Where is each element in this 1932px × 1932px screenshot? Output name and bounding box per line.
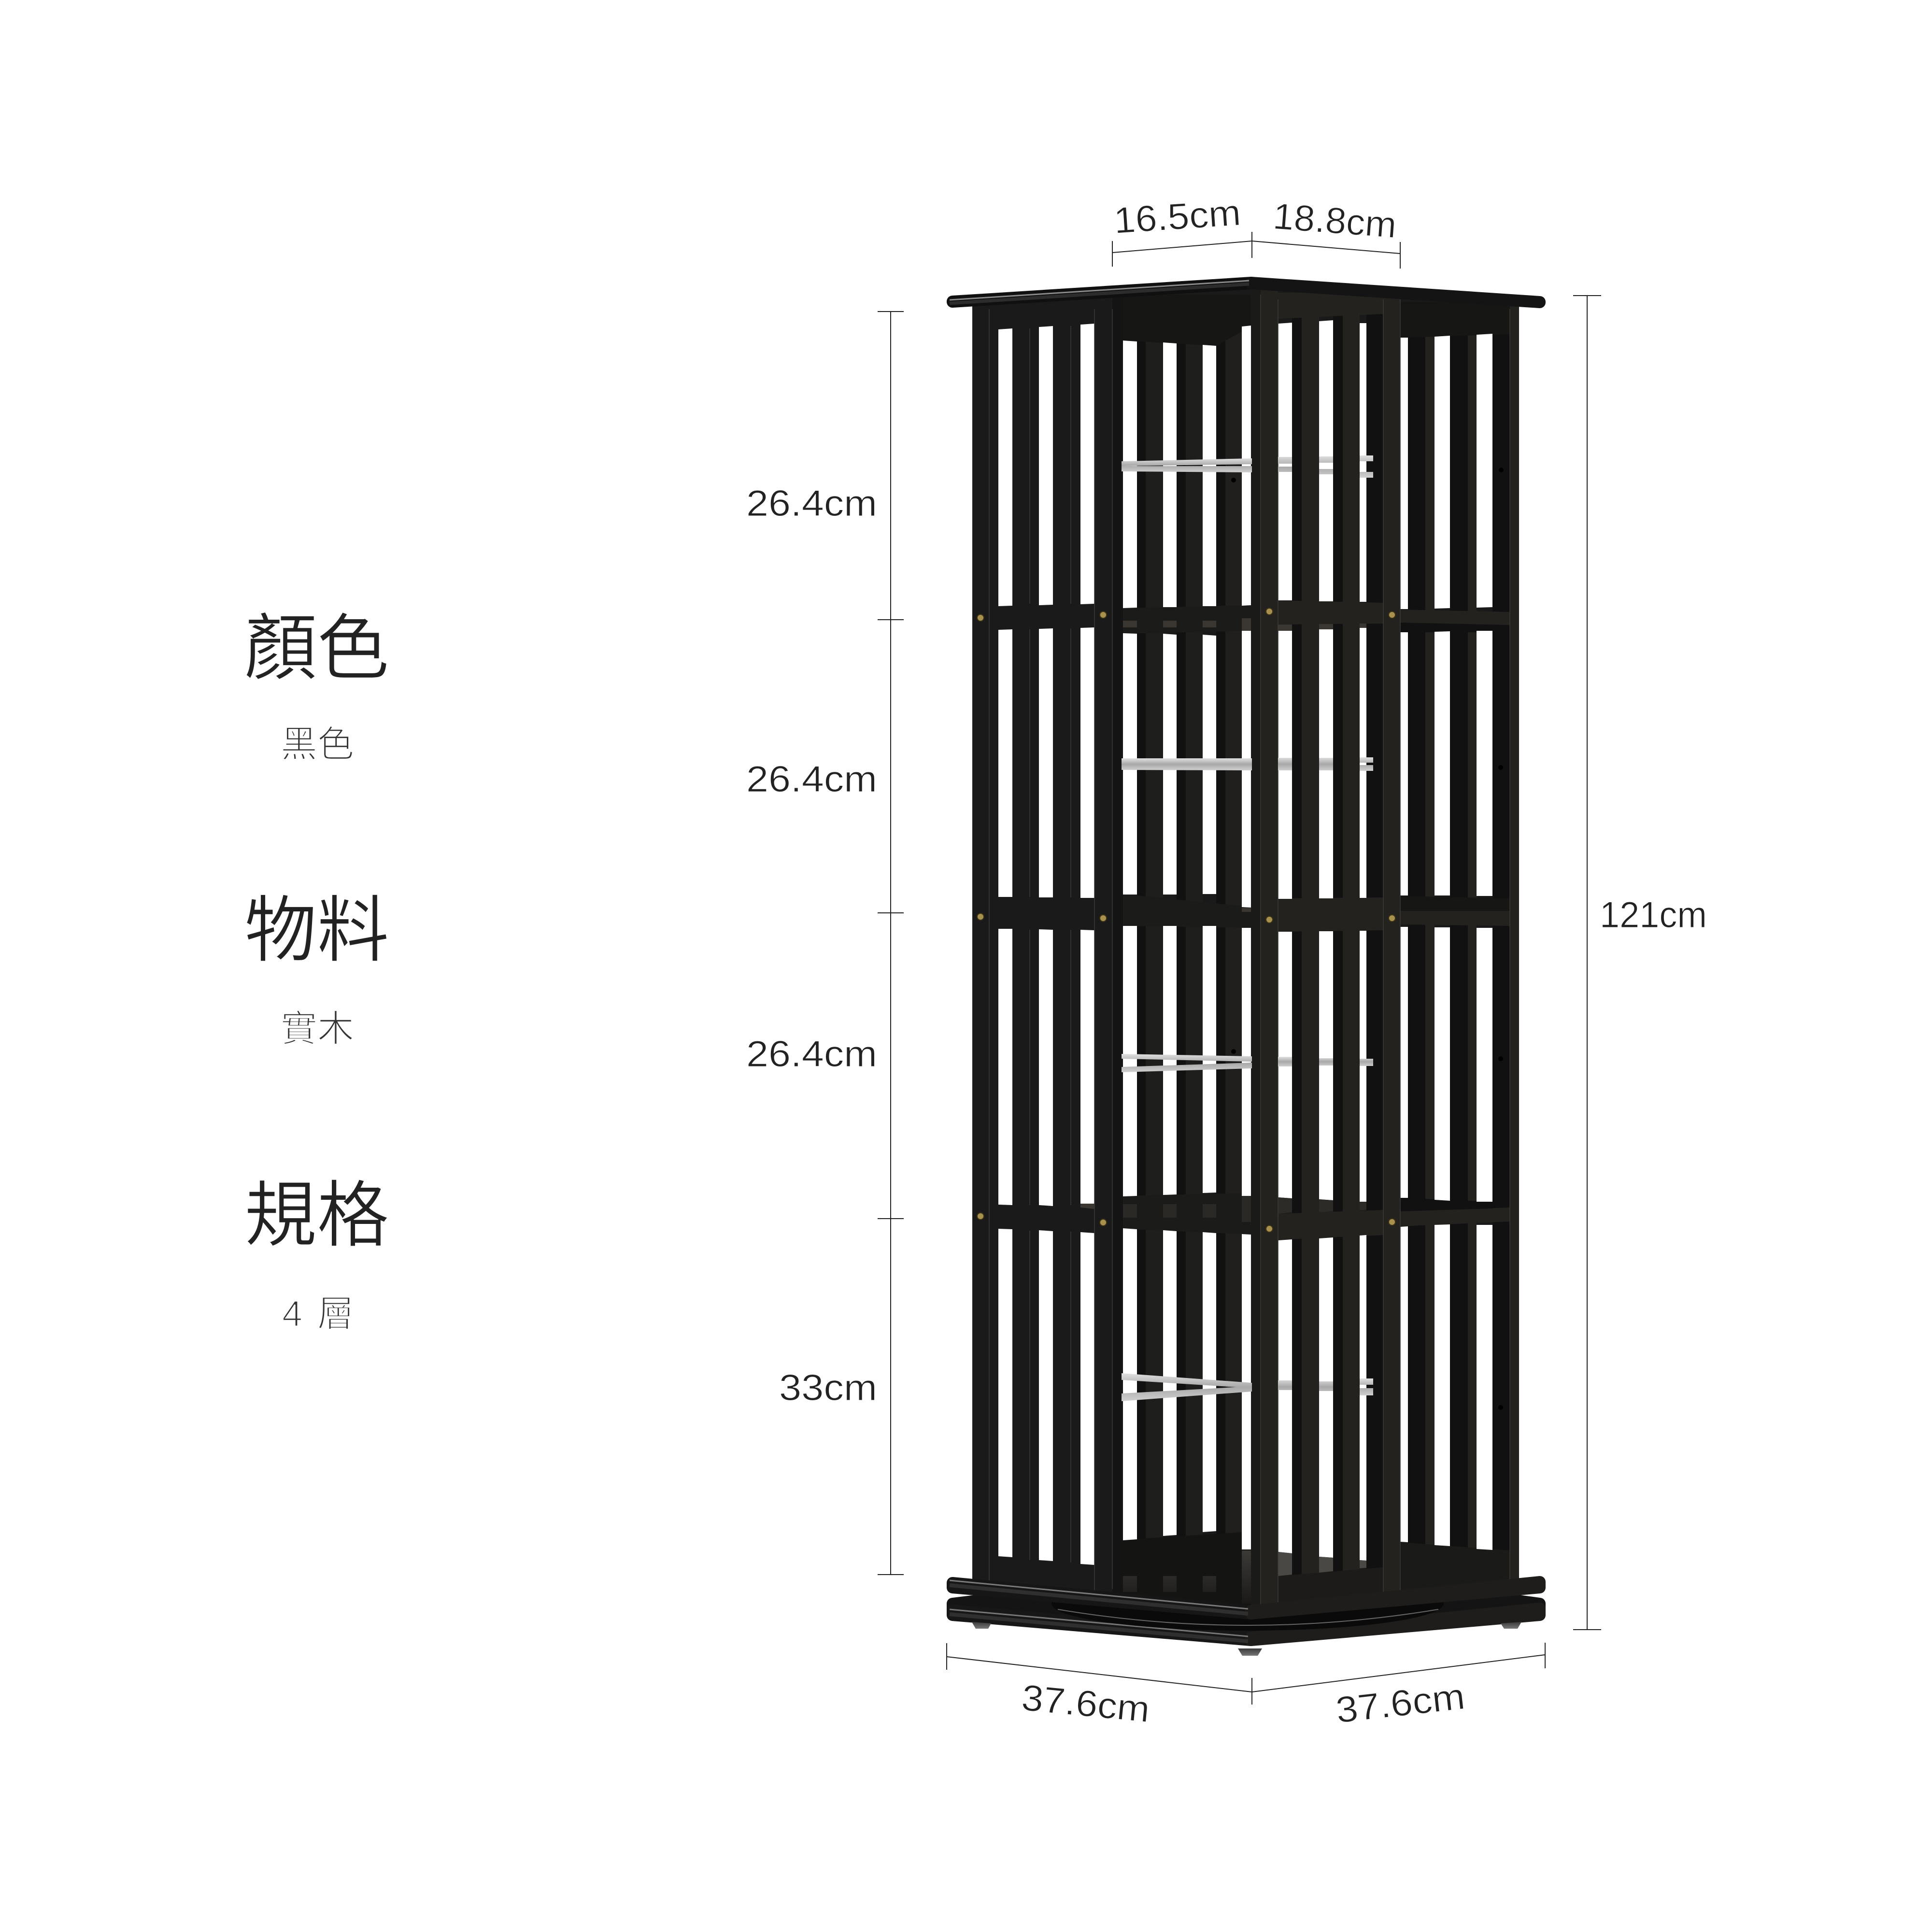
heading: specification: 規格 xyxy=(244,1175,389,1256)
heading: material: 物料 xyxy=(244,890,389,971)
brass screws xyxy=(977,608,1395,1232)
vertical slats xyxy=(1112,287,1519,1608)
label tier 2: 26.4cm xyxy=(746,759,877,800)
bookshelf product drawing xyxy=(950,281,1540,1656)
base turntable plate xyxy=(950,1577,1540,1641)
label 18.8cm: 18.8cm xyxy=(1272,196,1398,246)
label tier 3: 26.4cm xyxy=(746,1034,877,1075)
dimension: tier heights xyxy=(746,312,904,1575)
value: black: 黑色 xyxy=(281,724,354,765)
label tier 1: 26.4cm xyxy=(746,483,877,524)
value: 4 tiers: 層 xyxy=(317,1293,354,1335)
peg holes xyxy=(1231,468,1504,1410)
panel seams xyxy=(989,295,1510,1608)
label right 37.6cm: 37.6cm xyxy=(1334,1676,1467,1731)
metal rods: behind front xyxy=(1278,455,1373,1395)
dimension: top depth xyxy=(1112,192,1400,269)
label tier 4: 33cm xyxy=(779,1367,877,1408)
open gaps: front face xyxy=(1278,320,1366,1561)
heading: colour: 顏色 xyxy=(244,608,389,689)
dimension: base width xyxy=(947,1643,1545,1731)
top board xyxy=(950,281,1540,303)
shelf body xyxy=(972,285,1519,1611)
dimension: overall height xyxy=(1573,296,1707,1630)
open gaps: inner face xyxy=(1123,326,1251,1549)
open gaps: left face xyxy=(998,324,1094,1565)
open gaps: right face xyxy=(1400,334,1492,1550)
shelf boards seen through gaps xyxy=(1080,618,1366,1604)
value: solid wood: 實木 xyxy=(281,1009,354,1050)
lower rotating board xyxy=(950,1580,1540,1614)
spec list xyxy=(244,608,389,1335)
rubber feet xyxy=(972,1622,1521,1656)
label 121cm: 121cm xyxy=(1600,895,1707,936)
shelf rails xyxy=(989,293,1510,1608)
value: 4 tiers: 4 xyxy=(282,1293,302,1335)
label left 37.6cm: 37.6cm xyxy=(1020,1677,1151,1730)
metal rods: inner face xyxy=(1122,458,1252,1401)
label 16.5cm: 16.5cm xyxy=(1112,192,1242,242)
